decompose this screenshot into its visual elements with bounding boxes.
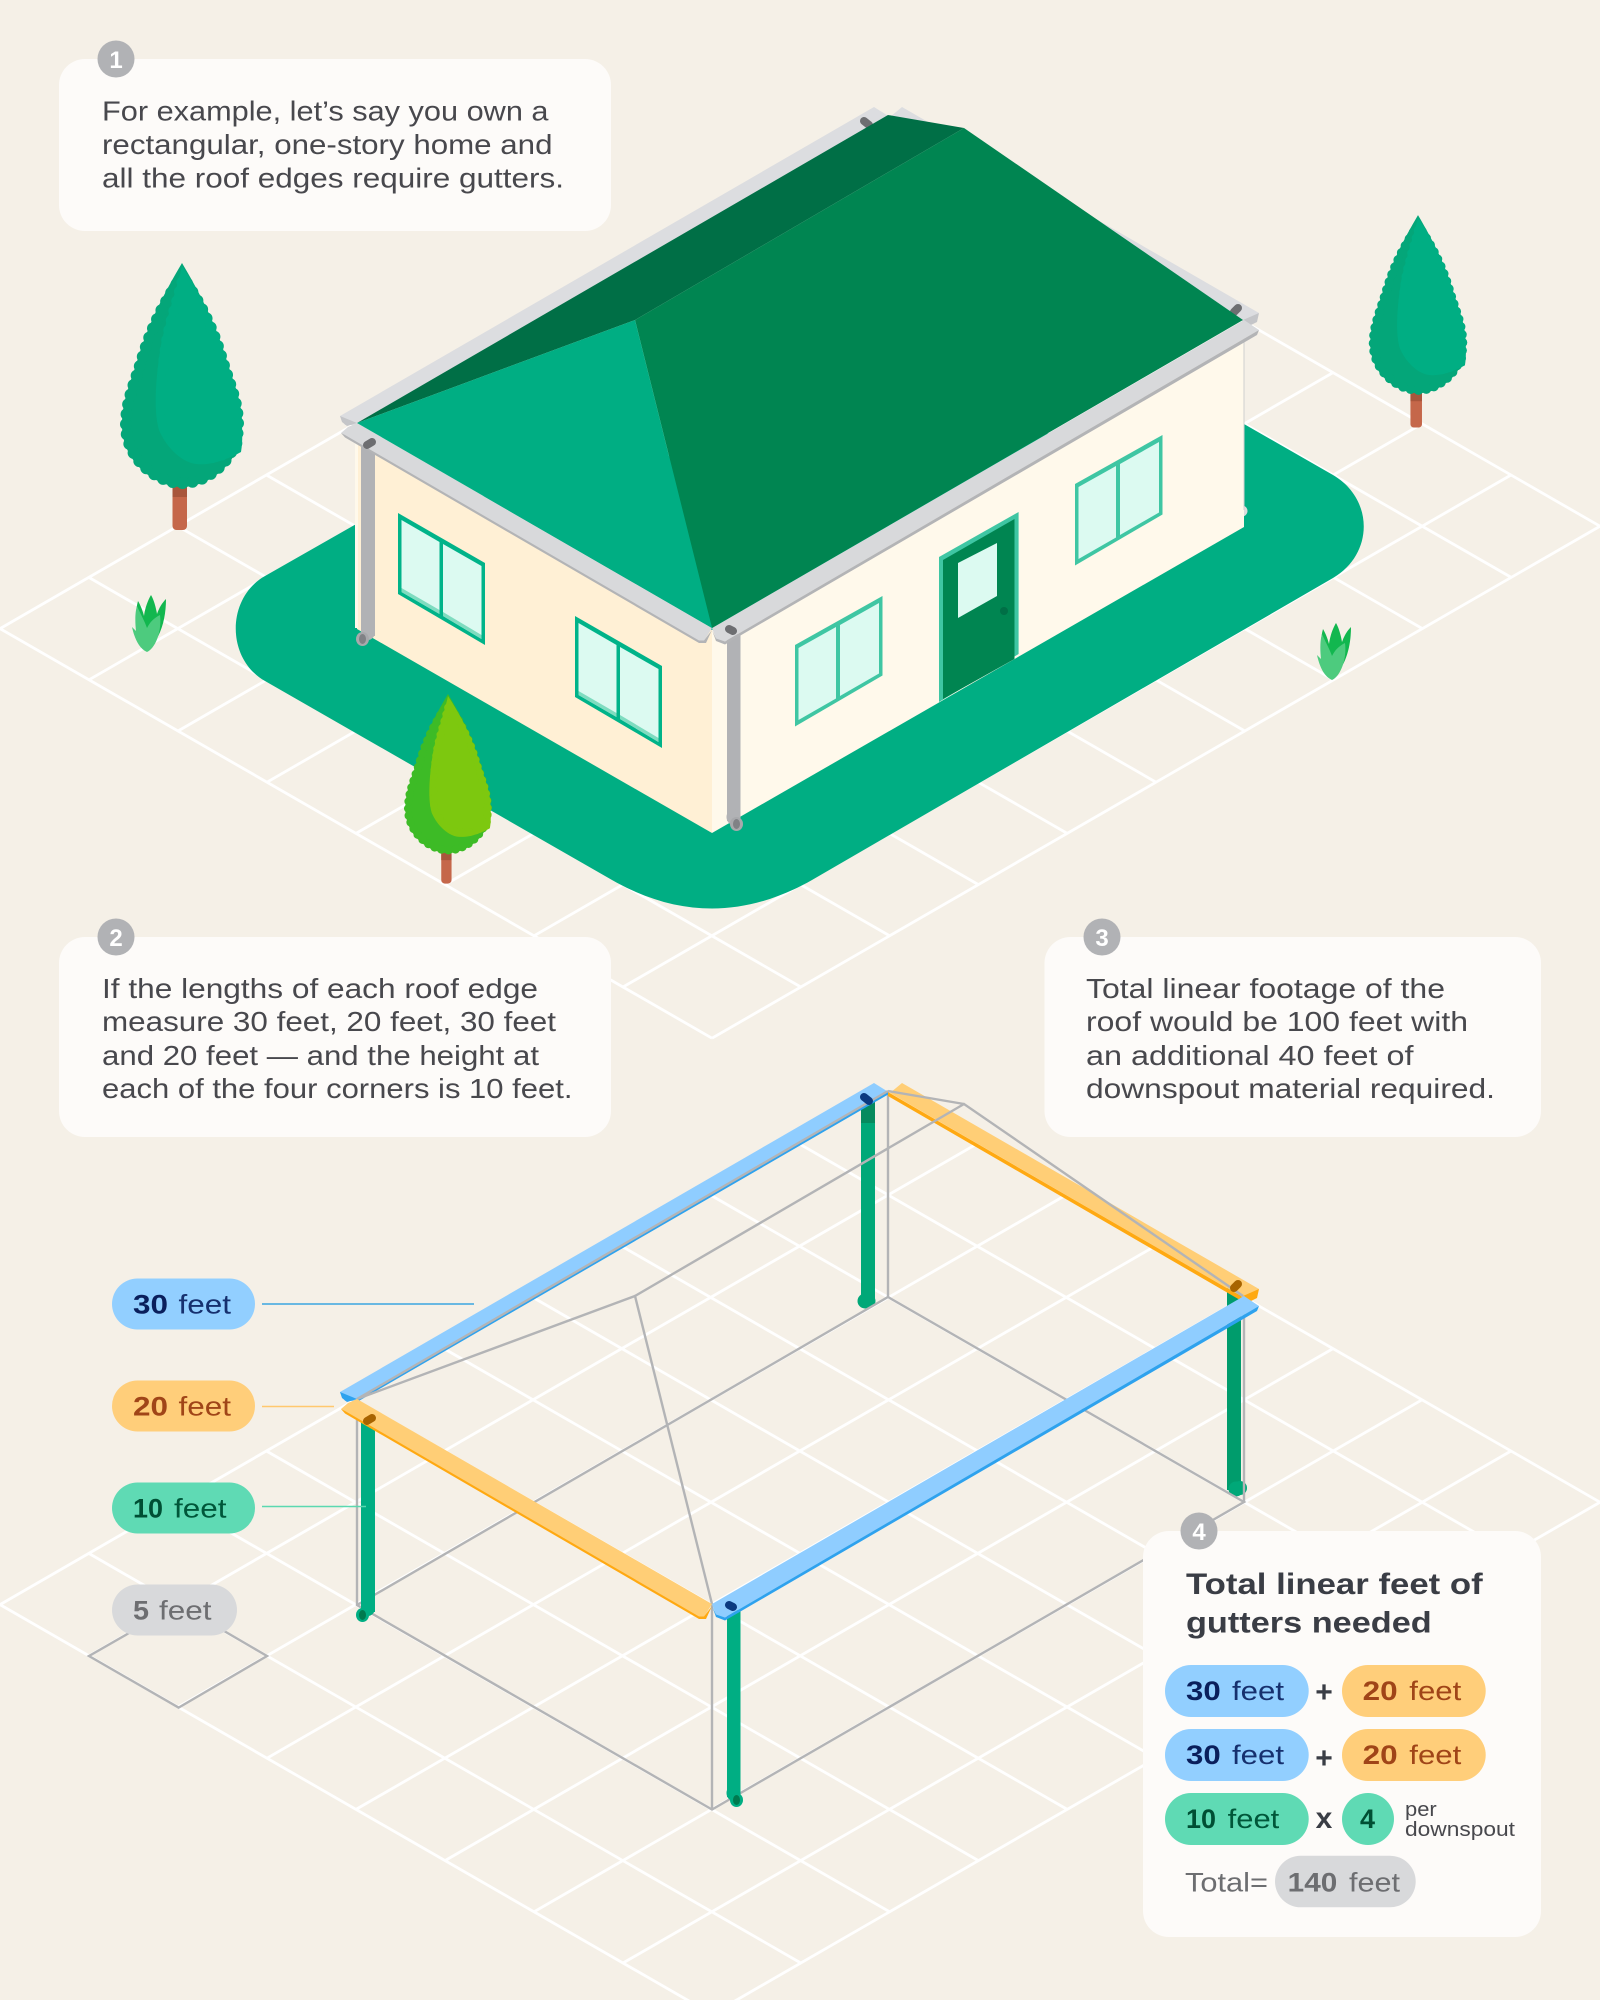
text 1: For example, let’s say you own a (102, 96, 549, 126)
equation row 3: feet (1228, 1804, 1280, 1834)
text 2 (102, 973, 572, 1104)
grass tuft: right (1317, 623, 1351, 680)
roof (357, 115, 1243, 628)
badge 4 (1180, 1512, 1218, 1550)
tree trunk (441, 852, 452, 884)
equation row 3: 10 (1186, 1804, 1216, 1834)
badge 2: 2 (109, 925, 123, 952)
total row: feet (1349, 1868, 1401, 1898)
scale square: 5 feet (89, 1604, 267, 1708)
tree: right (1370, 215, 1466, 427)
equation row 2 (1165, 1729, 1486, 1781)
wireframe: roof lines (357, 1091, 1243, 1604)
window: right wall 2 (1075, 435, 1162, 566)
text 3 (1086, 973, 1495, 1104)
door (939, 512, 1019, 702)
window: left wall 1 (398, 513, 485, 645)
legend pill: 20 feet (112, 1380, 255, 1432)
window: left wall 2 (575, 616, 662, 748)
equation row 3: 4 (1360, 1804, 1375, 1834)
panel heading: gutters needed (1186, 1607, 1432, 1640)
callout 3 (1044, 918, 1541, 1137)
lawn under the house (236, 424, 1364, 908)
wireframe: walls and base (357, 1091, 1244, 1810)
wireframe house diagram (340, 1083, 1259, 1810)
text 3: Total linear footage of the (1086, 973, 1445, 1004)
equation row 1: + (1315, 1676, 1333, 1709)
badge 4: 4 (1192, 1519, 1206, 1546)
badge 1: 1 (109, 47, 123, 74)
icons: far downspout openings (864, 1097, 1238, 1288)
equation row 2: feet (1232, 1740, 1285, 1770)
tree trunk (172, 485, 187, 530)
text 3: an additional 40 feet of (1086, 1040, 1414, 1071)
legend pill: 5 feet (112, 1584, 237, 1636)
window: right wall 1 (795, 596, 882, 726)
equation row 1: feet (1232, 1676, 1285, 1706)
text 2: measure 30 feet, 20 feet, 30 feet (102, 1006, 556, 1037)
equation row 2: + (1315, 1742, 1333, 1775)
downspout: front (726, 634, 743, 831)
equation row 2: feet (1409, 1740, 1462, 1770)
equation row 3 (1165, 1793, 1515, 1845)
tree: front lime (405, 694, 491, 884)
callout 2 (59, 918, 611, 1137)
panel heading (1186, 1568, 1484, 1640)
grass tuft: left (132, 595, 166, 652)
downspout: front 10 feet (726, 1610, 743, 1807)
total row: Total= (1185, 1868, 1268, 1898)
total row (1185, 1856, 1416, 1907)
badge 3 (1084, 918, 1120, 956)
equation row 1: 30 (1186, 1676, 1221, 1706)
text 1: rectangular, one-story home and (102, 129, 552, 160)
badge 1 (98, 40, 134, 78)
total row: 140 (1288, 1868, 1337, 1898)
equation row 3: downspout (1405, 1819, 1515, 1841)
wall: right (712, 322, 1244, 833)
legend pill: 10 feet: 10 (133, 1494, 163, 1524)
back downspout peeking behind wall (1236, 506, 1248, 516)
legend pill: 30 feet: feet (178, 1290, 232, 1320)
leader line: 20 feet (262, 1406, 334, 1408)
tree foliage (1370, 215, 1466, 393)
leader line: 30 feet (262, 1303, 474, 1305)
text 2: and 20 feet — and the height at (102, 1040, 539, 1071)
equation row 1: 20 (1363, 1676, 1398, 1706)
equation row 2: 20 (1363, 1740, 1398, 1770)
text 2: If the lengths of each roof edge (102, 973, 538, 1004)
gutter: front-left 20 feet (341, 1399, 712, 1619)
back gutters (340, 107, 1259, 426)
tree trunk (1410, 392, 1422, 427)
text 3: downspout material required. (1086, 1073, 1495, 1104)
front gutters (341, 320, 1259, 644)
legend pill: 5 feet: 5 (133, 1596, 149, 1626)
legend pill: 10 feet (112, 1482, 255, 1534)
equation row 1 (1165, 1665, 1486, 1717)
legend pill: 20 feet: 20 (133, 1392, 168, 1422)
callout 1 (59, 40, 611, 231)
equation row 3: per (1405, 1799, 1437, 1821)
icon: back downspout openings (864, 121, 1238, 312)
gutter: front-right 30 feet (712, 1296, 1259, 1620)
text 1: all the roof edges require gutters. (102, 162, 564, 194)
panel: total linear feet (1143, 1512, 1541, 1937)
text 3: roof would be 100 feet with (1086, 1006, 1468, 1037)
legend pill: 20 feet: feet (178, 1392, 232, 1422)
downspout: left (356, 444, 375, 646)
legend pill: 30 feet: 30 (133, 1290, 168, 1320)
text 2: each of the four corners is 10 feet. (102, 1073, 572, 1104)
leader line: 10 feet (262, 1506, 366, 1508)
equation row 3: x (1316, 1802, 1333, 1835)
legend pill: 10 feet: feet (174, 1494, 227, 1524)
wall: left (357, 425, 712, 833)
legend pill: 30 feet (112, 1278, 255, 1330)
tree: left (122, 263, 242, 530)
icon: front downspout openings (367, 442, 733, 631)
gutter: back-right 20 feet (888, 1083, 1259, 1302)
badge 3: 3 (1095, 925, 1109, 952)
gutter: back-left 30 feet (340, 1083, 890, 1402)
downspout: left 10 feet (356, 1420, 375, 1622)
equation row 2: 30 (1186, 1740, 1221, 1770)
tree foliage (405, 694, 491, 853)
wireframe: far downspouts (858, 1095, 1247, 1496)
tree foliage (122, 263, 242, 487)
icons: front downspout openings (367, 1418, 733, 1607)
text 1 (102, 96, 564, 194)
equation row 1: feet (1409, 1676, 1462, 1706)
panel heading: Total linear feet of (1186, 1568, 1484, 1601)
legend pill: 5 feet: feet (159, 1596, 212, 1626)
badge 2 (98, 918, 134, 956)
house (340, 107, 1259, 833)
